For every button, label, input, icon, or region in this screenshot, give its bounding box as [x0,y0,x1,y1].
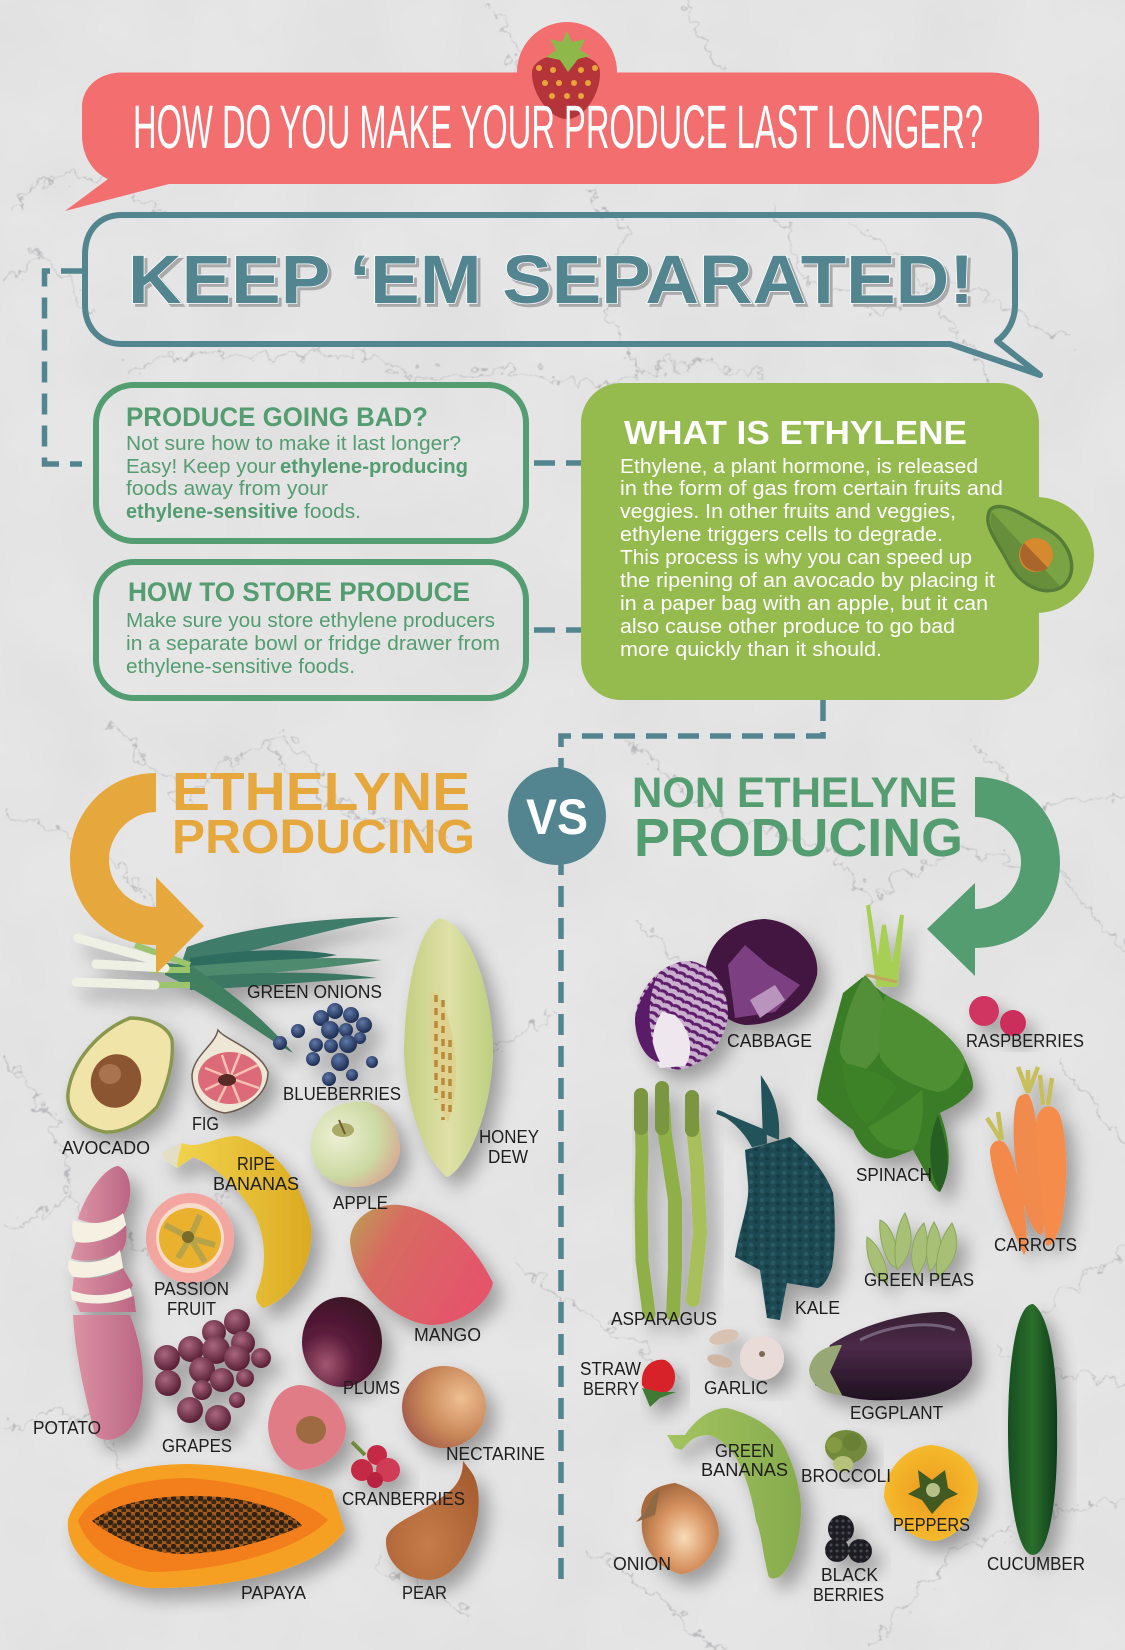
produce labels: PAPAYA [241,1583,306,1603]
plum [302,1297,382,1387]
produce labels: POTATO [33,1418,101,1438]
produce labels: GREEN ONIONS [247,982,382,1002]
produce labels: ONION [613,1554,671,1574]
blueberries [273,1003,378,1086]
produce labels: MANGO [414,1325,481,1345]
avocado [68,1018,172,1132]
gold arrow [70,773,204,974]
eggplant [809,1312,972,1400]
produce labels: GRAPES [162,1436,232,1456]
body text: This process is why you can speed up [620,547,972,569]
produce labels: FRUIT [167,1299,216,1319]
heading: PRODUCE GOING BAD? [126,402,428,432]
kale [717,1082,835,1320]
produce labels: CUCUMBER [987,1554,1085,1574]
body text: ethylene-sensitive [126,501,298,523]
header speech bubble [65,22,1039,211]
body text: in a paper bag with an apple, but it can [620,593,988,615]
passion fruit [146,1193,234,1283]
body text: veggies. In other fruits and veggies, [620,501,956,523]
apple [311,1102,400,1187]
ripe banana [162,1136,311,1308]
body text: foods. [304,501,361,523]
body text: also cause other produce to go bad [620,616,955,638]
sweet potato [68,1166,143,1440]
honeydew melon [404,918,493,1177]
papaya [68,1464,345,1588]
garlic [706,1326,784,1380]
body text: foods away from your [126,478,328,500]
produce labels: NECTARINE [446,1444,545,1464]
panel: how to store produce [96,562,526,698]
body text: Make sure you store ethylene producers [126,610,495,632]
produce labels: HONEY [479,1127,539,1147]
produce labels: FIG [192,1114,219,1134]
heading: ethelyne producing [172,762,475,864]
produce labels: PEAR [402,1583,447,1603]
body text: more quickly than it should. [620,639,882,661]
body text [126,433,468,523]
produce labels: CRANBERRIES [342,1489,465,1509]
fig [192,1030,268,1113]
produce labels: PEPPERS [893,1515,970,1535]
dashed connectors [44,271,823,1589]
heading: non ethelyne producing [632,769,963,868]
produce labels: APPLE [333,1193,388,1213]
bell pepper [884,1445,978,1541]
strawberry [642,1360,676,1407]
icon: strawberry [532,31,600,119]
body text: ethylene-producing [280,456,468,478]
body text: the ripening of an avocado by placing it [620,570,995,592]
body text: Ethylene, a plant hormone, is released [620,456,978,478]
carrots [987,1067,1066,1255]
cranberries [351,1442,400,1488]
produce labels: BROCCOLI [801,1466,891,1486]
body text [620,456,1003,661]
asparagus [641,1088,700,1314]
green onions [76,917,400,1053]
onion [636,1483,719,1574]
cabbage [635,919,817,1070]
cucumber [1008,1304,1057,1555]
mango [350,1205,493,1325]
produce labels: STRAW [580,1359,641,1379]
produce labels [33,982,1085,1605]
nectarine [402,1366,486,1448]
green peas [867,1213,957,1283]
VS badge [508,767,606,865]
body text [126,610,500,678]
icon: avocado [988,506,1072,591]
produce labels: GREEN [715,1441,774,1461]
raspberries [969,996,1026,1036]
produce labels: EGGPLANT [850,1403,943,1423]
body text: ethylene triggers cells to degrade. [620,524,943,546]
heading: HOW TO STORE PRODUCE [128,577,470,607]
produce labels: SPINACH [856,1165,932,1185]
produce labels: CABBAGE [727,1031,812,1051]
grapes [154,1309,271,1431]
icon: strawberry backing circle [517,22,617,122]
body text: Easy! Keep your [126,456,276,478]
produce labels: BLUEBERRIES [283,1084,401,1104]
spinach [817,905,973,1192]
produce labels: BERRY [583,1379,639,1399]
produce labels: BLACK [821,1565,878,1585]
pear [386,1461,479,1580]
produce labels: KALE [795,1298,840,1318]
body text: in the form of gas from certain fruits and [620,478,1003,500]
produce labels: BANANAS [701,1460,788,1480]
produce labels: CARROTS [994,1235,1077,1255]
main title: KEEP ‘EM SEPARATED! [128,241,974,318]
produce labels: GARLIC [704,1378,768,1398]
produce labels: PLUMS [343,1378,400,1398]
green arrow [927,777,1060,976]
blackberries [825,1515,872,1563]
VS badge: VS [526,789,588,845]
body text: ethylene-sensitive foods. [126,656,355,678]
produce labels: BERRIES [813,1585,884,1605]
heading: WHAT IS ETHYLENE [624,414,967,451]
produce labels: RASPBERRIES [966,1031,1084,1051]
produce labels: AVOCADO [62,1138,150,1158]
heading: non ethelyne producing: PRODUCING [634,808,963,868]
produce labels: BANANAS [213,1174,299,1194]
heading: non ethelyne producing: NON ETHELYNE [632,769,957,817]
green banana [667,1408,801,1578]
body text: Not sure how to make it last longer? [126,433,461,455]
produce labels: RIPE [237,1154,275,1174]
panel: what is ethylene [581,383,1094,700]
panel: produce going bad [96,385,526,541]
produce labels: DEW [488,1147,528,1167]
bubble shape [65,72,1039,211]
broccoli [825,1430,867,1472]
produce labels: PASSION [154,1279,229,1299]
peach half [268,1385,346,1470]
heading: ethelyne producing: PRODUCING [172,811,475,864]
produce labels: ASPARAGUS [611,1309,717,1329]
body text: in a separate bowl or fridge drawer from [126,633,500,655]
heading: ethelyne producing: ETHELYNE [172,762,470,822]
produce labels: GREEN PEAS [864,1270,974,1290]
main title bubble [85,215,1040,375]
